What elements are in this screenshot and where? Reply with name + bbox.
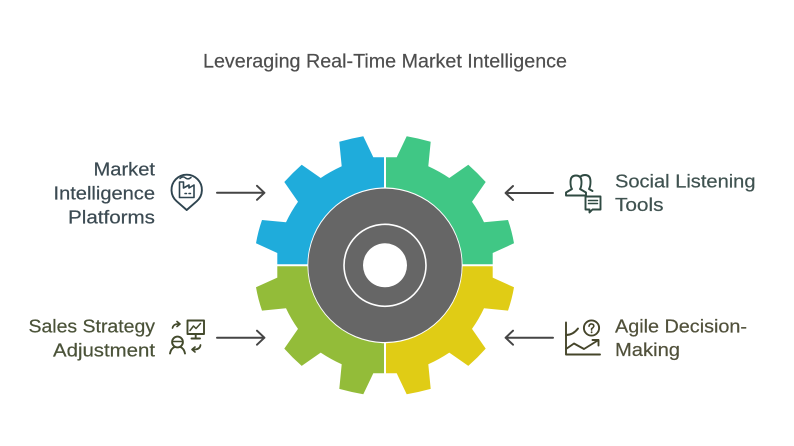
- label: Social Listening Tools: Tools: [615, 195, 664, 215]
- gear segment: olive: [256, 266, 384, 394]
- label: Market Intelligence Platforms: Platforms: [68, 208, 155, 228]
- gear segment: yellow: [386, 266, 514, 394]
- arrow: bottom left: [217, 331, 264, 345]
- label: Sales Strategy Adjustment: [28, 316, 155, 360]
- hub centre hole: [363, 243, 407, 287]
- icon: person, monitor and arrows: [170, 320, 204, 354]
- label: Social Listening Tools: Social Listening: [615, 172, 756, 192]
- label: Market Intelligence Platforms: [54, 160, 155, 228]
- gear hub: [308, 189, 462, 342]
- icon: chart with question mark: [566, 320, 600, 354]
- label: Agile Decision-Making: [615, 316, 747, 360]
- arrow: top left: [217, 186, 264, 200]
- arrow: top right: [506, 186, 553, 200]
- gear segment: blue: [256, 136, 384, 264]
- hub inner ring: [344, 224, 426, 306]
- label: Market Intelligence Platforms: Intelligence: [54, 184, 155, 204]
- label: Agile Decision-Making: Making: [615, 340, 680, 360]
- label: Social Listening Tools: [615, 172, 756, 215]
- icon: factory location pin: [172, 175, 202, 210]
- label: Sales Strategy Adjustment: Sales Strategy: [28, 316, 155, 336]
- label: Agile Decision-Making: Agile Decision-: [615, 316, 747, 336]
- title: Leveraging Real-Time Market Intelligence: [203, 52, 567, 72]
- icon: people with speech bubble: [566, 175, 600, 212]
- label: Market Intelligence Platforms: Market: [94, 160, 155, 180]
- arrow: bottom right: [506, 331, 553, 345]
- gear diagram: [256, 136, 514, 394]
- gear segment: green: [386, 136, 514, 264]
- label: Sales Strategy Adjustment: Adjustment: [53, 340, 155, 360]
